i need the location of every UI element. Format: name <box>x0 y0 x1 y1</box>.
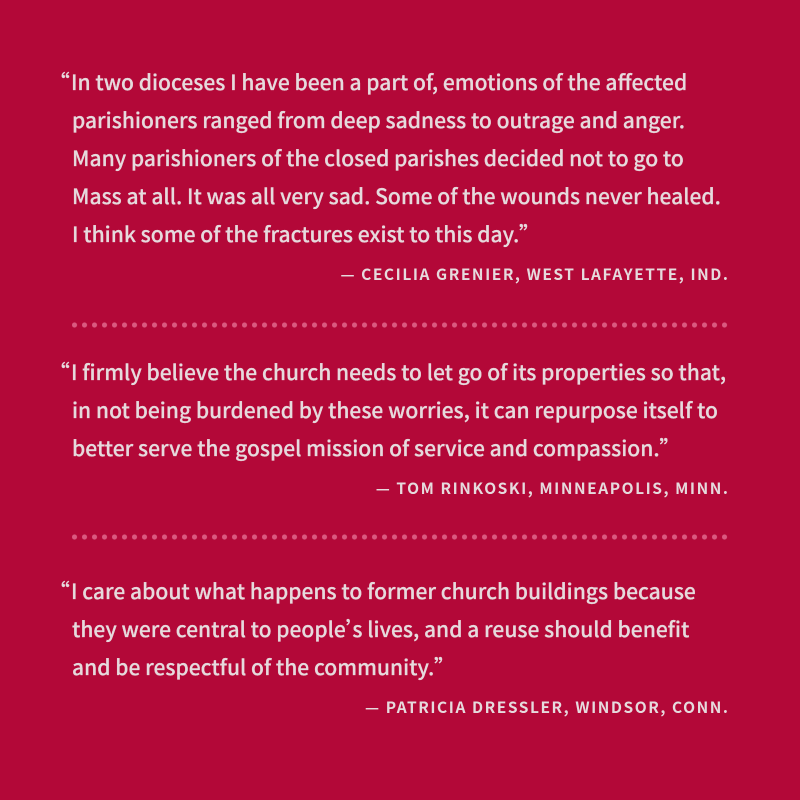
quote text line 2: in not being burdened by these worries, it can repurpose itself to <box>72 395 718 425</box>
attribution: — PATRICIA DRESSLER, WINDSOR, CONN. <box>365 696 730 718</box>
quote text line 4: Mass at all. It was all very sad. Some of the wounds never healed. <box>72 181 721 211</box>
quote text line 2: parishioners ranged from deep sadness to outrage and anger. <box>72 105 685 135</box>
attribution: — TOM RINKOSKI, MINNEAPOLIS, MINN. <box>376 477 730 499</box>
quote text line 3: and be respectful of the community.” <box>72 652 445 682</box>
quote text line 1: “In two dioceses I have been a part of, emotions of the affected <box>59 67 687 97</box>
quote: Tom Rinkoski <box>59 357 730 499</box>
quote text line 2: ’ <box>346 614 356 644</box>
quote text line 1: “I care about what happens to former church buildings because <box>59 576 696 606</box>
attribution: — CECILIA GRENIER, WEST LAFAYETTE, IND. <box>340 263 730 285</box>
quote text line 5: I think some of the fractures exist to this day.” <box>72 219 530 249</box>
dotted divider 1 <box>72 322 729 328</box>
quote text line 1: “I firmly believe the church needs to let go of its properties so that, <box>59 357 726 387</box>
dotted divider 2 <box>72 534 729 540</box>
quote text line 2: they were central to people s lives, and a reuse should benefit <box>72 614 689 644</box>
quote text line 3: Many parishioners of the closed parishes decided not to go to <box>72 143 684 173</box>
quote: Cecilia Grenier <box>59 67 730 285</box>
quote text line 3: better serve the gospel mission of service and compassion.” <box>72 433 670 463</box>
